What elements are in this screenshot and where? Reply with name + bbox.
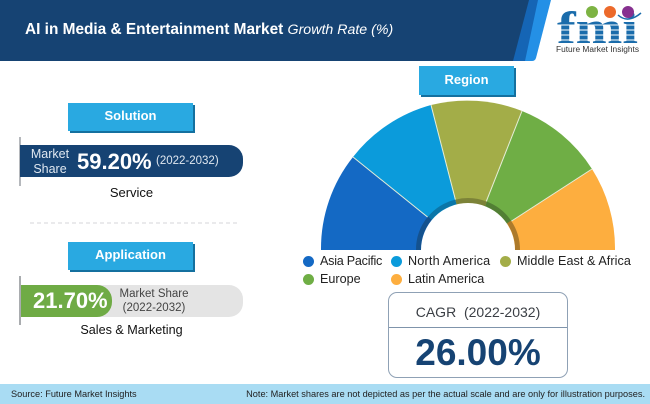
- segment: Middle East & Africa: [431, 101, 522, 250]
- title: AI in Media & Entertainment Market Growth Rate (%): [25, 21, 393, 38]
- inner ring: [418, 201, 518, 250]
- CAGR box: [388, 292, 568, 378]
- market share bar: Service: (2022-2032): [156, 155, 219, 167]
- legend: [303, 254, 631, 286]
- market share bar: Sales & Marketing: 21.70%: [33, 288, 108, 313]
- legend item: Europe: Europe: [320, 272, 361, 286]
- tag: Solution: Solution: [104, 108, 156, 123]
- market share bar: Sales & Marketing: (2022-2032): [123, 302, 185, 314]
- legend item: Latin America: Latin America: [408, 272, 484, 286]
- logo: Future Market Insights: Future Market Insights: [556, 45, 639, 54]
- semicircle chart: regions: [321, 100, 615, 250]
- CAGR label: CAGR (2022-2032): [416, 304, 540, 320]
- legend item: North America: North America: [408, 254, 490, 268]
- tag: Application: Application: [95, 247, 166, 262]
- legend item: Asia Pacific: Asia Pacific: [320, 254, 382, 268]
- tag: Region: [419, 66, 514, 95]
- label: Sales & Marketing: Sales & Marketing: [80, 323, 183, 337]
- market share bar: Service: [19, 137, 243, 186]
- legend item: Middle East & Africa: Middle East & Africa: [517, 254, 631, 268]
- tag: Region: Region: [444, 72, 489, 87]
- segment: Asia Pacific: [321, 157, 468, 250]
- segment: Europe: [468, 111, 592, 250]
- segment: Latin America: [468, 169, 615, 250]
- market share bar: Service: Share: [33, 162, 67, 176]
- market share bar: Sales & Marketing: [19, 276, 243, 325]
- footer bar: [0, 384, 650, 404]
- header banner: [0, 0, 551, 61]
- note: Note: Market shares are not depicted as per the actual scale and are only for illustration purposes.: [246, 389, 645, 399]
- source: Source: Future Market Insights: [11, 389, 137, 399]
- market share bar: Service: 59.20%: [77, 149, 152, 174]
- tag: Solution: [68, 103, 193, 131]
- segment: North America: [353, 105, 468, 250]
- tag: Application: [68, 242, 193, 270]
- label: Service: Service: [110, 185, 153, 200]
- market share bar: Service: Market: [31, 147, 69, 161]
- CAGR value: 26.00%: [415, 332, 541, 373]
- market share bar: Sales & Marketing: Market Share: [119, 288, 189, 300]
